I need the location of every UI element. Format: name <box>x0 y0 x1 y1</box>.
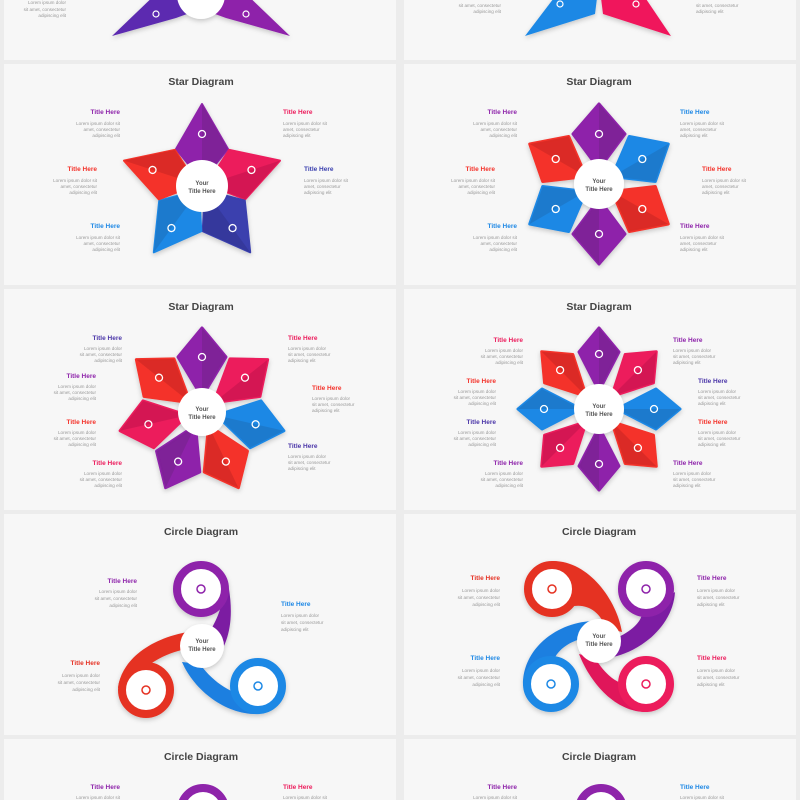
text block: top-right partial right: adipiscing elit <box>696 9 724 14</box>
labels: star 8: Title Here <box>493 460 523 467</box>
labels: star 7: Lorem ipsum dolor <box>58 430 96 435</box>
labels: circle 4: sit amet, consectetur <box>697 595 740 600</box>
labels: star 8: adipiscing elit <box>495 360 524 365</box>
text block: top-left partial <box>24 0 67 18</box>
labels: circle 4: adipiscing elit <box>472 602 501 607</box>
labels: Lorem ipsum dolor sit <box>76 795 121 800</box>
labels: star 8: adipiscing elit <box>468 442 497 447</box>
labels: star 6: amet, consectetur <box>702 184 739 189</box>
labels: star 5: Lorem ipsum dolor sit <box>53 178 98 183</box>
labels: circle 3: Title Here <box>281 601 311 608</box>
labels: star 6: Lorem ipsum dolor sit <box>702 178 747 183</box>
labels: star 5 <box>53 109 349 252</box>
star chart 7: Title Here <box>188 415 216 421</box>
labels: circle 3: adipiscing elit <box>72 687 101 692</box>
labels: circle 4: sit amet, consectetur <box>458 675 500 680</box>
labels: star 7: Lorem ipsum dolor <box>84 346 122 351</box>
labels: star 6: Title Here <box>465 166 495 173</box>
text block: top-right partial left: adipiscing elit <box>473 9 502 14</box>
labels: star 5: amet, consectetur <box>83 127 120 132</box>
labels: star 6: adipiscing elit <box>467 190 496 195</box>
labels: star 8: adipiscing elit <box>495 483 524 488</box>
labels: star 8: Lorem ipsum dolor <box>458 430 496 435</box>
labels: star 5: adipiscing elit <box>69 190 98 195</box>
labels: star 7: sit amet, consectetur <box>80 352 122 357</box>
labels: Title Here <box>283 784 313 791</box>
labels: star 5: Lorem ipsum dolor sit <box>76 121 121 126</box>
labels: star 7 <box>54 335 355 488</box>
labels: star 7: Title Here <box>92 460 122 467</box>
labels: circle 4: Title Here <box>470 655 500 662</box>
labels: circle 3: sit amet, consectetur <box>281 620 324 625</box>
labels: star 7: adipiscing elit <box>312 408 340 413</box>
labels: star 6: Title Here <box>487 109 517 116</box>
labels: star 6: Lorem ipsum dolor sit <box>473 235 518 240</box>
heading: Circle Diagram <box>164 526 238 538</box>
labels: star 6: Title Here <box>680 109 710 116</box>
labels: star 7: Lorem ipsum dolor <box>312 396 351 401</box>
panel: top-left partial star <box>4 0 396 60</box>
labels: star 5: Lorem ipsum dolor sit <box>283 121 328 126</box>
labels: star 8: adipiscing elit <box>698 401 726 406</box>
labels: star 8: Lorem ipsum dolor <box>485 471 523 476</box>
labels: Title Here <box>680 784 710 791</box>
labels: star 6: amet, consectetur <box>480 241 517 246</box>
labels: star 8: sit amet, consectetur <box>454 436 496 441</box>
labels: star 8: Title Here <box>493 337 523 344</box>
labels: circle 3: adipiscing elit <box>281 627 309 632</box>
labels: star 5: Title Here <box>283 109 313 116</box>
labels: star 5: Title Here <box>90 223 120 230</box>
labels: circle 4: Lorem ipsum dolor <box>462 668 500 673</box>
labels: star 6: Title Here <box>680 223 710 230</box>
labels: circle 4: Lorem ipsum dolor <box>462 588 500 593</box>
labels: star 7: adipiscing elit <box>288 466 316 471</box>
labels: star 7: Title Here <box>288 335 318 342</box>
labels: Title Here <box>487 784 517 791</box>
labels: star 6: amet, consectetur <box>680 241 717 246</box>
panel: top-right partial star <box>404 0 796 60</box>
labels: circle 4: adipiscing elit <box>472 682 501 687</box>
labels <box>473 784 725 800</box>
labels: Title Here <box>90 784 120 791</box>
labels: star 6: amet, consectetur <box>480 127 517 132</box>
labels: star 6: Lorem ipsum dolor sit <box>680 121 725 126</box>
star chart 6: Title Here <box>585 187 613 193</box>
labels: star 7: sit amet, consectetur <box>54 390 96 395</box>
labels: star 7: sit amet, consectetur <box>54 436 96 441</box>
labels: star 6: Title Here <box>487 223 517 230</box>
labels: star 7: Lorem ipsum dolor <box>288 454 327 459</box>
circle chart 4: Title Here <box>585 642 613 648</box>
labels: star 8: Lorem ipsum dolor <box>698 430 737 435</box>
labels: star 8: Title Here <box>673 460 703 467</box>
labels: star 7: Lorem ipsum dolor <box>58 384 96 389</box>
labels: circle 3: Lorem ipsum dolor <box>281 613 320 618</box>
text block: top-right partial right <box>696 3 739 14</box>
labels: circle 4: Title Here <box>697 575 727 582</box>
star chart 5: Your <box>195 181 209 187</box>
labels: star 5: amet, consectetur <box>304 184 341 189</box>
ring partial <box>181 788 225 800</box>
panel: star diagram 7 <box>4 289 396 510</box>
labels: star 8: Lorem ipsum dolor <box>673 348 712 353</box>
text block: top-right partial left <box>459 3 502 14</box>
heading: Star Diagram <box>168 301 234 313</box>
labels: circle 4 <box>458 575 740 687</box>
labels: star 6: adipiscing elit <box>489 133 518 138</box>
labels: star 7: Title Here <box>288 443 318 450</box>
labels: star 5: Title Here <box>304 166 334 173</box>
text block: top-right partial left: sit amet, consectetur <box>459 3 501 8</box>
star chart 5: Title Here <box>188 189 216 195</box>
labels: star 8: sit amet, consectetur <box>698 395 741 400</box>
labels: star 6: adipiscing elit <box>680 133 708 138</box>
labels: star 8: adipiscing elit <box>673 360 701 365</box>
star chart 7 <box>115 328 289 498</box>
labels: star 6: amet, consectetur <box>458 184 495 189</box>
labels: circle 4: Lorem ipsum dolor <box>697 668 736 673</box>
labels: star 8: adipiscing elit <box>468 401 497 406</box>
labels: star 8: Lorem ipsum dolor <box>485 348 523 353</box>
labels: star 5: adipiscing elit <box>283 133 311 138</box>
star chart 6 <box>517 104 681 264</box>
labels: star 5: adipiscing elit <box>92 247 121 252</box>
text block: top-left partial: adipiscing elit <box>38 13 67 18</box>
labels: star 6: adipiscing elit <box>489 247 518 252</box>
petals: partial star right <box>525 0 671 36</box>
labels: star 7: adipiscing elit <box>68 396 97 401</box>
labels: star 6: adipiscing elit <box>680 247 708 252</box>
labels: circle 4: sit amet, consectetur <box>458 595 500 600</box>
labels: star 7: adipiscing elit <box>288 358 316 363</box>
labels: star 8: Lorem ipsum dolor <box>458 389 496 394</box>
labels: star 7: sit amet, consectetur <box>80 477 122 482</box>
labels: star 5: amet, consectetur <box>283 127 320 132</box>
labels: star 7: Title Here <box>92 335 122 342</box>
labels: circle 4: Lorem ipsum dolor <box>697 588 736 593</box>
labels: star 7: Title Here <box>312 385 342 392</box>
panel: bottom-left partial circle diagram <box>4 739 396 800</box>
labels: star 7: adipiscing elit <box>94 358 123 363</box>
labels: circle 4: adipiscing elit <box>697 682 725 687</box>
labels: circle 3: Lorem ipsum dolor <box>99 589 137 594</box>
text block: top-right partial right: sit amet, consectetur <box>696 3 739 8</box>
labels: circle 3 <box>58 578 324 692</box>
text block: top-left partial: sit amet, consectetur <box>24 7 66 12</box>
labels: circle 4: Title Here <box>470 575 500 582</box>
heading: Star Diagram <box>168 76 234 88</box>
labels: star 8: sit amet, consectetur <box>454 395 496 400</box>
labels: star 8: sit amet, consectetur <box>698 436 741 441</box>
labels: circle 3: Title Here <box>107 578 137 585</box>
labels: star 6: amet, consectetur <box>680 127 717 132</box>
labels: star 5: Lorem ipsum dolor sit <box>304 178 349 183</box>
labels: star 8: sit amet, consectetur <box>481 477 523 482</box>
labels: star 7: Title Here <box>66 373 96 380</box>
labels: star 6: adipiscing elit <box>702 190 730 195</box>
labels: star 7: sit amet, consectetur <box>288 460 331 465</box>
labels: star 5: amet, consectetur <box>83 241 120 246</box>
labels: star 8: Lorem ipsum dolor <box>698 389 737 394</box>
labels: circle 3: Title Here <box>70 660 100 667</box>
labels: Lorem ipsum dolor sit <box>680 795 725 800</box>
ring partial <box>579 788 623 800</box>
star chart 6: Your <box>592 179 606 185</box>
labels: star 8: Title Here <box>698 419 728 426</box>
panel: circle diagram 3 <box>4 514 396 735</box>
labels: circle 4: adipiscing elit <box>697 602 725 607</box>
labels: star 5: Title Here <box>67 166 97 173</box>
star chart 7: Your <box>195 407 209 413</box>
labels: circle 4: sit amet, consectetur <box>697 675 740 680</box>
labels: star 7: Lorem ipsum dolor <box>84 471 122 476</box>
labels: Lorem ipsum dolor sit <box>283 795 328 800</box>
labels: star 8: Title Here <box>466 378 496 385</box>
labels: star 6 <box>451 109 747 252</box>
labels: star 8: Lorem ipsum dolor <box>673 471 712 476</box>
labels: star 5: adipiscing elit <box>92 133 121 138</box>
labels: circle 3: adipiscing elit <box>109 603 138 608</box>
heading: Circle Diagram <box>562 526 636 538</box>
labels: star 8: sit amet, consectetur <box>673 477 716 482</box>
labels: star 7: adipiscing elit <box>94 483 123 488</box>
circle chart 4: Your <box>592 634 606 640</box>
labels: star 7: Title Here <box>66 419 96 426</box>
panel: bottom-right partial circle diagram <box>404 739 796 800</box>
circle chart 3: Title Here <box>188 647 216 653</box>
panel: star diagram 6 <box>404 64 796 285</box>
star chart 8: Title Here <box>585 412 613 418</box>
labels: star 7: adipiscing elit <box>68 442 97 447</box>
labels: star 8: Title Here <box>673 337 703 344</box>
labels: star 6: Lorem ipsum dolor sit <box>473 121 518 126</box>
labels: star 8: Title Here <box>698 378 728 385</box>
labels: star 8 <box>454 337 741 488</box>
labels: circle 3: Lorem ipsum dolor <box>62 673 100 678</box>
labels: star 7: Lorem ipsum dolor <box>288 346 327 351</box>
circle chart 3 <box>118 565 282 714</box>
heading: Star Diagram <box>566 76 632 88</box>
heading: Star Diagram <box>566 301 632 313</box>
text block: top-left partial: Lorem ipsum dolor <box>28 0 66 5</box>
labels: star 5: amet, consectetur <box>60 184 97 189</box>
labels: star 8: adipiscing elit <box>673 483 701 488</box>
labels: star 7: sit amet, consectetur <box>288 352 331 357</box>
panel: circle diagram 4 <box>404 514 796 735</box>
heading: Circle Diagram <box>164 751 238 763</box>
labels: star 6: Lorem ipsum dolor sit <box>680 235 725 240</box>
labels: star 8: Title Here <box>466 419 496 426</box>
labels: circle 4: Title Here <box>697 655 727 662</box>
labels: star 7: sit amet, consectetur <box>312 402 355 407</box>
labels: star 5: adipiscing elit <box>304 190 332 195</box>
labels: star 6: Lorem ipsum dolor sit <box>451 178 496 183</box>
star chart 8: Your <box>592 404 606 410</box>
star chart 5 <box>116 104 288 268</box>
panel: star diagram 5 <box>4 64 396 285</box>
circle chart 3: Your <box>195 639 209 645</box>
labels: star 5: Lorem ipsum dolor sit <box>76 235 121 240</box>
labels: star 5: Title Here <box>90 109 120 116</box>
labels: circle 3: sit amet, consectetur <box>95 596 137 601</box>
labels: star 8: sit amet, consectetur <box>673 354 716 359</box>
labels: star 6: Title Here <box>702 166 732 173</box>
labels: Lorem ipsum dolor sit <box>473 795 518 800</box>
labels: star 8: adipiscing elit <box>698 442 726 447</box>
labels: star 8: sit amet, consectetur <box>481 354 523 359</box>
circle chart 4 <box>523 561 675 712</box>
star chart 8 <box>518 328 680 490</box>
petals: partial star <box>112 0 290 36</box>
heading: Circle Diagram <box>562 751 636 763</box>
labels <box>76 784 328 800</box>
labels: circle 3: sit amet, consectetur <box>58 680 100 685</box>
panel: star diagram 8 <box>404 289 796 510</box>
